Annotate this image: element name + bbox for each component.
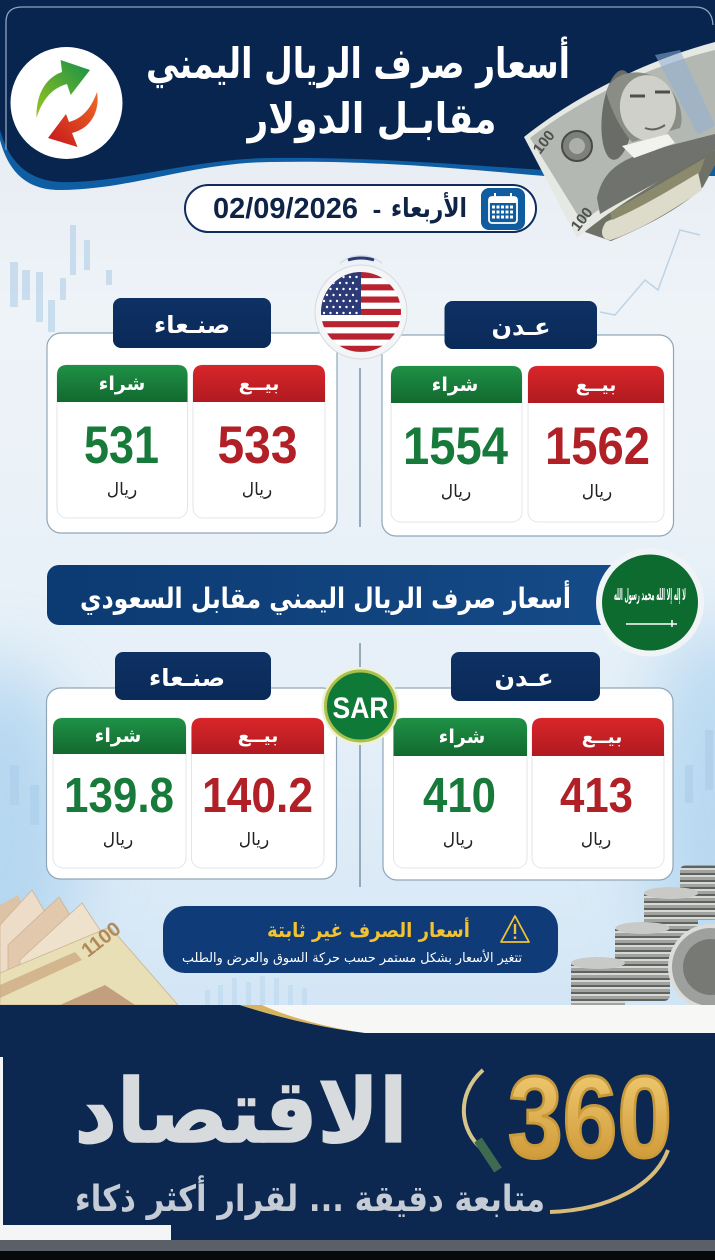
card: buy 1554: ريال <box>441 482 471 502</box>
card: sell 1562: ريال <box>582 482 612 502</box>
heading: Sanaa: صنـعاء <box>154 311 230 339</box>
heading: Aden <box>451 652 600 701</box>
title: أسعار صرف الريال اليمني <box>146 36 570 89</box>
card: sell 533: 533 <box>218 416 298 475</box>
illustration: Yemeni banknotes: 1100 <box>78 918 125 962</box>
card: buy 410: ريال <box>443 830 473 850</box>
callout: rates not fixed: تتغير الأسعار بشكل مستمر حسب حركة السوق والعرض والطلب <box>182 949 522 966</box>
card: sell 413: 413 <box>560 769 633 823</box>
card: buy 410 <box>394 718 527 868</box>
card: sell 140.2 <box>192 718 324 868</box>
panel: Aden SAR <box>383 652 673 880</box>
badge: SAR <box>322 667 400 745</box>
footer brand banner <box>0 1005 715 1260</box>
icon: warning triangle <box>501 916 529 942</box>
portrait on the bill <box>597 69 715 214</box>
card: sell 413: ريال <box>581 830 611 850</box>
panel: Sanaa SAR <box>46 652 336 879</box>
panel: Aden USD <box>382 301 674 536</box>
brand logo: 360: 360 <box>508 1052 672 1182</box>
card: sell 533: بيــع <box>239 373 279 395</box>
card: sell 413 <box>532 718 664 868</box>
icon: calendar <box>481 188 525 230</box>
card: buy 531 <box>57 365 188 518</box>
illustration: coin stacks <box>571 865 715 1010</box>
header banner <box>0 0 715 190</box>
date pill: الأربعاء <box>391 192 467 224</box>
card: buy 410: 410 <box>423 769 496 823</box>
card: buy 410: شراء <box>439 726 485 748</box>
icon: Saudi flag <box>596 548 704 656</box>
card: buy 139.8: 139.8 <box>64 769 174 823</box>
card: buy 139.8 <box>53 718 186 868</box>
badge: SAR: SAR <box>332 692 389 725</box>
illustration: rolled dollar bills: 100 <box>530 127 559 157</box>
section: USD rates <box>47 256 674 536</box>
icon: US flag <box>315 265 407 359</box>
card: sell 533: ريال <box>242 480 272 500</box>
card: sell 1562 <box>528 366 664 522</box>
section: SAR rates <box>46 643 673 887</box>
logo: exchange arrows <box>10 47 122 159</box>
heading: Aden <box>444 301 597 349</box>
card: buy 139.8: شراء <box>95 725 141 747</box>
card: buy 531: شراء <box>99 373 145 395</box>
brand name: الاقتصاد <box>74 1060 408 1163</box>
card: buy 531: 531 <box>84 416 159 475</box>
title <box>146 36 570 144</box>
section heading: SAR banner: أسعار صرف الريال اليمني مقابل السعودي <box>80 580 571 615</box>
card: sell 413: بيــع <box>582 726 622 748</box>
card: sell 140.2: ريال <box>239 830 269 850</box>
heading: Aden: عـدن <box>492 313 550 341</box>
heading: Sanaa <box>115 652 271 700</box>
heading: Sanaa: صنـعاء <box>149 664 225 692</box>
callout: rates not fixed <box>163 906 558 973</box>
card: buy 1554: 1554 <box>403 417 508 476</box>
illustration: Yemeni banknotes <box>0 890 178 1005</box>
card: sell 140.2: بيــع <box>238 725 278 747</box>
card: buy 139.8: ريال <box>103 830 133 850</box>
card: sell 1562: بيــع <box>576 374 616 396</box>
callout: rates not fixed: أسعار الصرف غير ثابتة <box>267 916 470 942</box>
date pill <box>185 185 536 232</box>
bill seal <box>562 131 592 161</box>
title: مقابـل الدولار <box>246 94 496 144</box>
illustration: rolled dollar bills <box>524 42 715 241</box>
panel: Sanaa USD <box>47 298 337 533</box>
card: sell 140.2: 140.2 <box>202 769 313 823</box>
card: buy 531: ريال <box>107 480 137 500</box>
card: sell 1562: 1562 <box>545 417 650 476</box>
heading: Aden: عـدن <box>495 664 553 692</box>
illustration: rolled dollar bills: 100 <box>568 204 597 234</box>
card: sell 533 <box>193 365 325 518</box>
brand logo: 360 <box>464 1052 672 1212</box>
date pill: 02/09/2026 <box>213 193 358 225</box>
card: buy 1554: شراء <box>432 374 478 396</box>
tagline: متابعة دقيقة ... لقرار أكثر ذكاء <box>75 1175 545 1220</box>
section heading: SAR banner <box>47 548 704 656</box>
date pill: - <box>373 194 381 224</box>
card: buy 1554 <box>391 366 522 522</box>
background <box>0 140 715 1005</box>
heading: Sanaa <box>113 298 271 348</box>
